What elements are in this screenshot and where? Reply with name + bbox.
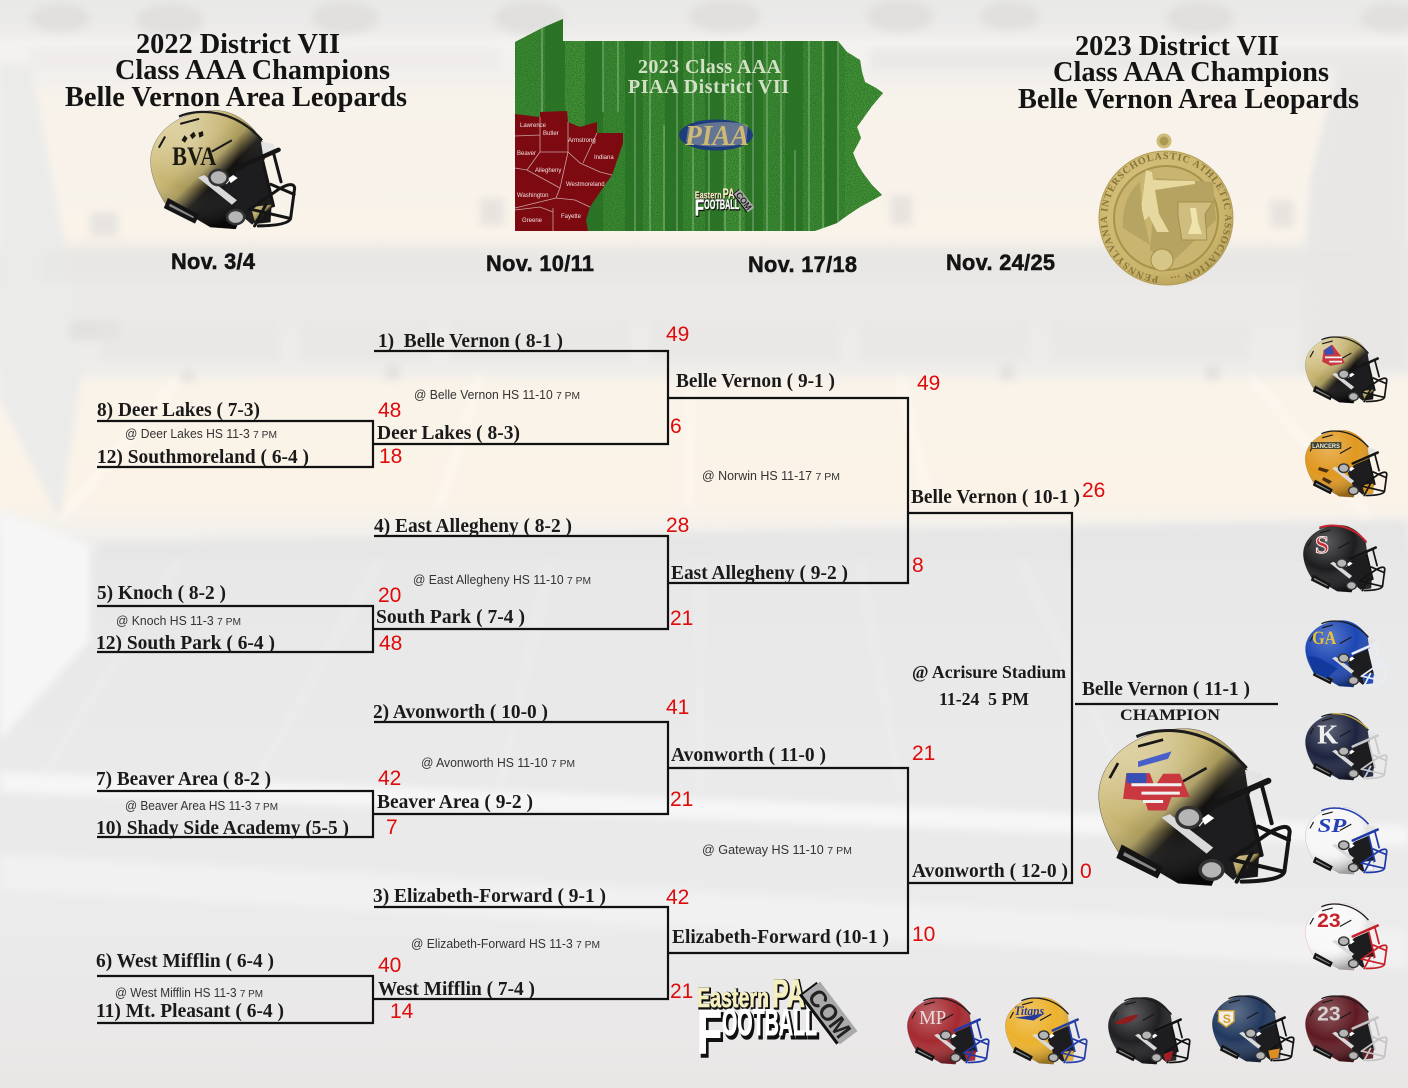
icon: helmet K: K xyxy=(1317,720,1338,750)
semifinal: Avonworth vs Elizabeth-Forward: Elizabeth-Forward (10-1 ) xyxy=(672,927,889,948)
first round: quarter 4 xyxy=(96,951,414,1023)
map: District VII counties: Armstrong xyxy=(568,138,596,144)
icon: helmet S: S xyxy=(1315,532,1329,559)
round dates: Nov. 17/18 xyxy=(748,252,857,277)
first round: quarter 2: 20 xyxy=(378,584,401,607)
icon: helmet maroon 23 xyxy=(1305,995,1387,1062)
second round: East Allegheny vs South Park: @ East Allegheny HS 11-10 7 PM xyxy=(413,573,591,587)
second round: Belle Vernon vs Deer Lakes xyxy=(377,323,689,444)
map: District VII counties: Allegheny xyxy=(535,168,561,174)
second round: Elizabeth-Forward vs West Mifflin: 3) Elizabeth-Forward ( 9-1 ) xyxy=(373,886,606,907)
map: District VII counties: Lawrence xyxy=(520,123,547,129)
icon: PIAA gold medal: PENNSYLVANIA INTERSCHOLASTIC ATHLETIC ASSOCIATION ... xyxy=(1100,152,1232,283)
first round: quarter 1: @ Deer Lakes HS 11-3 7 PM xyxy=(125,427,277,441)
heading: 2023 champions: Belle Vernon Area Leopards xyxy=(1018,84,1359,115)
icon: helmet Lancers xyxy=(1305,430,1387,497)
first round: quarter 2: 5) Knoch ( 8-2 ) xyxy=(97,583,226,604)
semifinal: Avonworth vs Elizabeth-Forward: 10 xyxy=(912,923,935,946)
second round: Belle Vernon vs Deer Lakes: Deer Lakes ( 8-3) xyxy=(377,423,520,444)
first round: quarter 1: 18 xyxy=(379,445,402,468)
second round: Belle Vernon vs Deer Lakes: 6 xyxy=(670,415,682,438)
icon: helmet GA: GA xyxy=(1312,628,1337,649)
first round: quarter 4: 14 xyxy=(390,1000,414,1023)
heading: 2022 champions: Belle Vernon Area Leopards xyxy=(65,82,407,113)
first round: quarter 4: 6) West Mifflin ( 6-4 ) xyxy=(96,951,274,972)
first round: quarter 4: 11) Mt. Pleasant ( 6-4 ) xyxy=(96,1001,284,1022)
icon: helmet navy shield xyxy=(1212,995,1294,1062)
first round: quarter 1: 48 xyxy=(378,399,401,422)
second round: Elizabeth-Forward vs West Mifflin: @ Elizabeth-Forward HS 11-3 7 PM xyxy=(411,937,600,951)
heading: 2022 champions xyxy=(65,29,407,113)
first round: quarter 3: 7) Beaver Area ( 8-2 ) xyxy=(96,769,271,790)
second round: Avonworth vs Beaver Area: 2) Avonworth ( 10-0 ) xyxy=(373,702,548,723)
icon: helmet 23 white xyxy=(1305,903,1387,970)
first round: quarter 3: 10) Shady Side Academy (5-5 ) xyxy=(96,818,349,839)
semifinal: Avonworth vs Elizabeth-Forward: Avonworth ( 11-0 ) xyxy=(671,745,826,766)
map: District VII counties: Butler xyxy=(543,131,559,137)
icon: helmet maroon 23: 23 xyxy=(1317,1004,1341,1026)
first round: quarter 3 xyxy=(96,767,401,839)
map title: 2023 Class AAA xyxy=(638,56,782,78)
round dates: Nov. 3/4 xyxy=(171,249,255,274)
map: District VII counties: Westmoreland xyxy=(566,182,605,188)
first round: quarter 4: @ West Mifflin HS 11-3 7 PM xyxy=(115,986,263,1000)
heading: 2022 champions: 2022 District VII xyxy=(136,29,340,60)
second round: East Allegheny vs South Park xyxy=(374,514,693,630)
logo: EasternPA Football small xyxy=(695,187,755,222)
first round: quarter 2: 12) South Park ( 6-4 ) xyxy=(96,633,275,654)
heading: 2023 champions xyxy=(1018,31,1359,115)
final: Belle Vernon vs Avonworth xyxy=(911,479,1105,883)
bracket lines xyxy=(97,351,1278,1023)
first round: quarter 1: 8) Deer Lakes ( 7-3) xyxy=(97,400,260,421)
map: Pennsylvania football field xyxy=(505,15,895,235)
round dates xyxy=(171,249,1055,277)
heading: 2022 champions: Class AAA Champions xyxy=(115,55,390,86)
semifinal: Belle Vernon vs East Allegheny: 8 xyxy=(912,554,924,577)
semifinal: Belle Vernon vs East Allegheny: 49 xyxy=(917,372,940,395)
semifinal: Avonworth vs Elizabeth-Forward: @ Gateway HS 11-10 7 PM xyxy=(702,843,852,857)
first round: quarter 1 xyxy=(97,399,402,468)
icon: helmet Mt. Pleasant: MP xyxy=(919,1007,946,1029)
semifinal: Belle Vernon vs East Allegheny: East Allegheny ( 9-2 ) xyxy=(671,563,848,584)
first round: quarter 2 xyxy=(96,583,402,655)
map: District VII counties: Greene xyxy=(522,218,543,224)
round dates: Nov. 10/11 xyxy=(486,251,594,276)
semifinal: Belle Vernon vs East Allegheny: Belle Vernon ( 9-1 ) xyxy=(676,371,835,392)
icon: helmet SP xyxy=(1305,807,1387,874)
first round: quarter 3: 42 xyxy=(378,767,401,790)
icon: helmet Lancers: LANCERS xyxy=(1312,443,1340,450)
logo: EasternPA Football large xyxy=(697,972,858,1070)
semifinal: Belle Vernon vs East Allegheny xyxy=(671,371,940,584)
first round: quarter 4: 40 xyxy=(378,954,401,977)
first round: quarter 1: 12) Southmoreland ( 6-4 ) xyxy=(97,447,309,468)
heading: 2023 champions: Class AAA Champions xyxy=(1053,57,1329,88)
second round: Avonworth vs Beaver Area: @ Avonworth HS 11-10 7 PM xyxy=(421,756,575,770)
semifinal: Avonworth vs Elizabeth-Forward xyxy=(671,742,935,948)
logo: PIAA: PIAA xyxy=(684,120,749,152)
icon: helmet black xyxy=(1108,997,1190,1064)
map title: PIAA District VII xyxy=(628,76,789,98)
final: Belle Vernon vs Avonworth: 26 xyxy=(1082,479,1105,502)
round dates: Nov. 24/25 xyxy=(946,250,1055,275)
map: District VII counties: Washington xyxy=(517,193,548,199)
map: District VII counties: Beaver xyxy=(517,151,536,157)
map title xyxy=(628,56,789,98)
map: District VII counties: Fayette xyxy=(561,214,582,220)
second round: East Allegheny vs South Park: 21 xyxy=(670,607,693,630)
icon: helmet navy shield: S xyxy=(1223,1012,1231,1026)
icon: helmet K xyxy=(1305,713,1387,780)
icon: helmet Titans: Titans xyxy=(1014,1004,1044,1018)
second round: Avonworth vs Beaver Area xyxy=(373,696,693,813)
second round: Elizabeth-Forward vs West Mifflin xyxy=(373,886,693,1003)
map: District VII counties xyxy=(515,111,623,231)
champion label: Belle Vernon ( 11-1 ) xyxy=(1082,679,1250,700)
icon: helmet GA xyxy=(1305,620,1387,687)
second round: East Allegheny vs South Park: 4) East Allegheny ( 8-2 ) xyxy=(374,516,572,537)
second round: Avonworth vs Beaver Area: 21 xyxy=(670,788,693,811)
second round: East Allegheny vs South Park: South Park ( 7-4 ) xyxy=(376,607,525,628)
semifinal: Belle Vernon vs East Allegheny: @ Norwin HS 11-17 7 PM xyxy=(702,469,840,483)
second round: Belle Vernon vs Deer Lakes: 49 xyxy=(666,323,689,346)
second round: East Allegheny vs South Park: 28 xyxy=(666,514,689,537)
final: Belle Vernon vs Avonworth: 11-24 5 PM xyxy=(939,689,1029,709)
final: Belle Vernon vs Avonworth: Avonworth ( 12-0 ) xyxy=(912,861,1068,882)
icon: champion Belle Vernon helmet xyxy=(1099,729,1290,886)
map: District VII counties: Indiana xyxy=(594,155,614,161)
icon: helmet Titans xyxy=(1005,997,1087,1064)
second round: Elizabeth-Forward vs West Mifflin: 21 xyxy=(670,980,693,1003)
final: Belle Vernon vs Avonworth: 0 xyxy=(1080,860,1092,883)
first round: quarter 3: @ Beaver Area HS 11-3 7 PM xyxy=(125,799,278,813)
second round: Belle Vernon vs Deer Lakes: 1) Belle Vernon ( 8-1 ) xyxy=(378,331,563,352)
icon: helmet Mt. Pleasant xyxy=(907,997,989,1064)
icon: helmet Belle Vernon small xyxy=(1305,336,1387,403)
icon: Belle Vernon helmet 2022: BVA xyxy=(172,141,216,171)
final: Belle Vernon vs Avonworth: Belle Vernon ( 10-1 ) xyxy=(911,487,1080,508)
icon: helmet S xyxy=(1303,525,1385,592)
semifinal: Avonworth vs Elizabeth-Forward: 21 xyxy=(912,742,935,765)
second round: Avonworth vs Beaver Area: 41 xyxy=(666,696,689,719)
second round: Elizabeth-Forward vs West Mifflin: 42 xyxy=(666,886,689,909)
final: Belle Vernon vs Avonworth: @ Acrisure Stadium xyxy=(912,662,1066,682)
second round: Avonworth vs Beaver Area: Beaver Area ( 9-2 ) xyxy=(377,792,533,813)
first round: quarter 3: 7 xyxy=(386,816,398,839)
heading: 2023 champions: 2023 District VII xyxy=(1075,31,1279,62)
icon: helmet 23 white: 23 xyxy=(1317,911,1341,932)
first round: quarter 2: 48 xyxy=(379,632,402,655)
icon: Belle Vernon helmet 2022 xyxy=(151,110,295,229)
champion label: CHAMPION xyxy=(1120,707,1220,724)
icon: helmet SP: SP xyxy=(1318,815,1347,837)
second round: Elizabeth-Forward vs West Mifflin: West Mifflin ( 7-4 ) xyxy=(378,979,535,1000)
champion label xyxy=(1082,679,1250,724)
first round: quarter 2: @ Knoch HS 11-3 7 PM xyxy=(116,614,241,628)
second round: Belle Vernon vs Deer Lakes: @ Belle Vernon HS 11-10 7 PM xyxy=(414,388,580,402)
